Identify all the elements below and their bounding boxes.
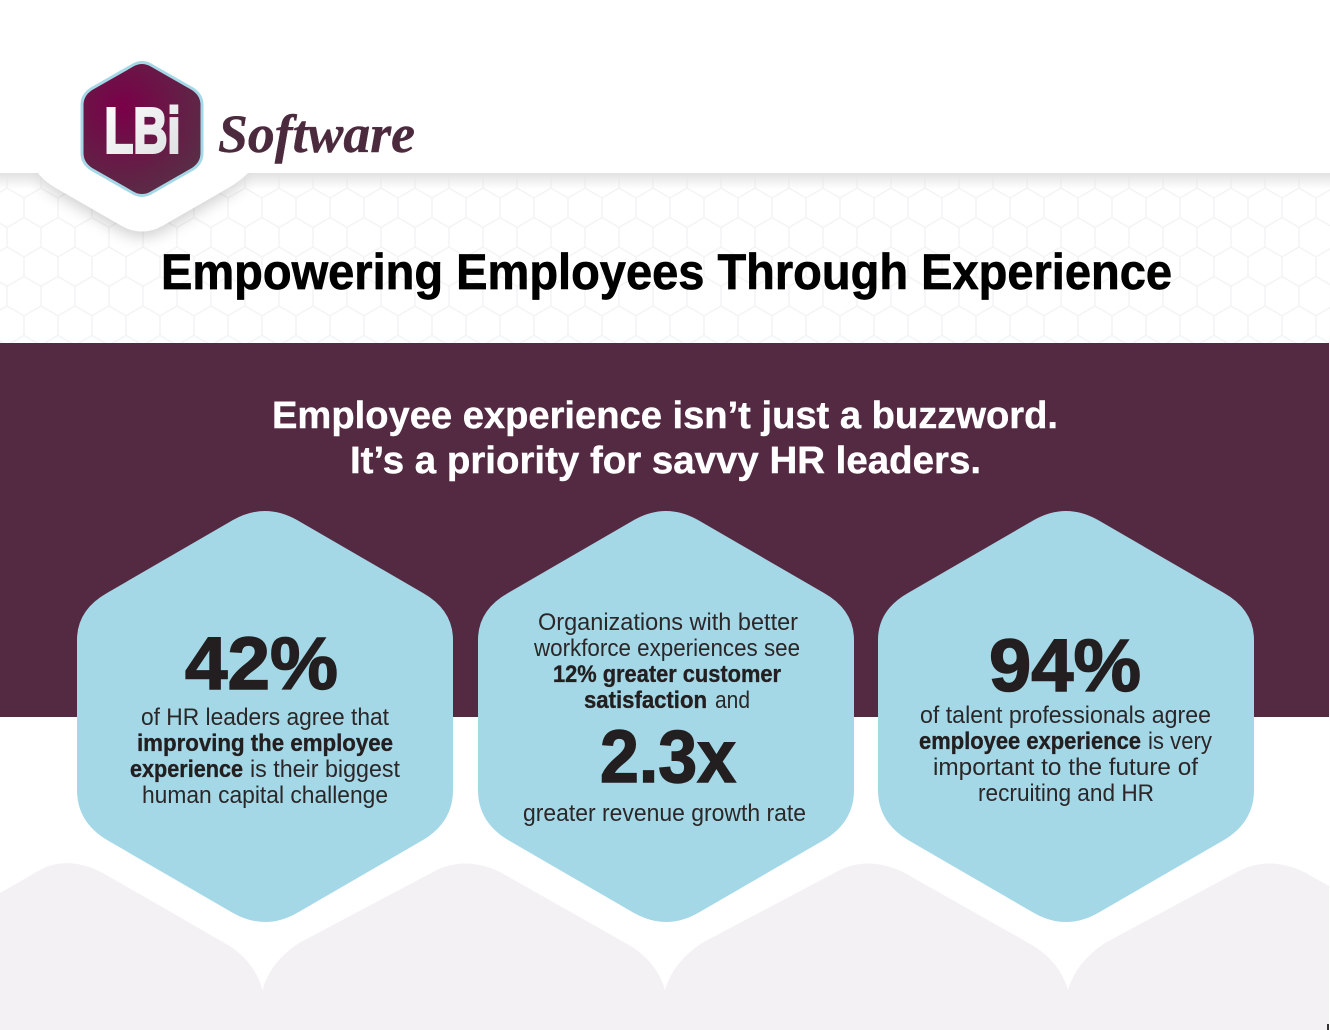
number 94%: 94% xyxy=(989,624,1141,707)
description: recruiting and HR xyxy=(978,780,1154,807)
description: is very xyxy=(1148,728,1212,755)
panel: 94% stat xyxy=(878,511,1254,922)
honeycomb background band xyxy=(0,173,1330,343)
intro text xyxy=(533,609,800,714)
closing text: greater revenue growth rate xyxy=(523,800,806,827)
subheading: Employee experience isn’t just a buzzword. xyxy=(272,395,1058,437)
description xyxy=(919,702,1212,807)
logo xyxy=(82,62,415,196)
white header strip xyxy=(0,0,1330,173)
intro text: Organizations with better xyxy=(538,609,798,636)
Software wordmark: Software xyxy=(218,104,415,164)
corner mark xyxy=(1327,1024,1329,1030)
description: of HR leaders agree that xyxy=(141,704,389,731)
icon: LBi hexagon xyxy=(82,62,202,196)
intro text: 12% greater customer xyxy=(553,661,781,688)
intro text: and xyxy=(715,687,750,714)
intro text: workforce experiences see xyxy=(533,635,800,662)
hexagon 3 xyxy=(878,511,1254,922)
description: important to the future of xyxy=(933,754,1198,781)
description: improving the employee xyxy=(137,730,393,757)
description: human capital challenge xyxy=(142,782,388,809)
subheading: It’s a priority for savvy HR leaders. xyxy=(350,440,981,482)
description: of talent professionals agree xyxy=(920,702,1211,729)
logo tab xyxy=(38,173,248,232)
hexagon 2 xyxy=(478,511,854,922)
hexagon 1 xyxy=(77,511,453,922)
LBi wordmark: LBi xyxy=(104,94,180,166)
description: experience xyxy=(130,756,243,783)
number 2.3x: 2.3x xyxy=(600,715,736,798)
description: employee experience xyxy=(919,728,1141,755)
purple band xyxy=(0,343,1329,717)
intro text: satisfaction xyxy=(584,687,707,714)
description xyxy=(130,704,400,809)
panel: 2.3x stat xyxy=(478,511,854,922)
number 42%: 42% xyxy=(185,622,338,705)
subheading xyxy=(272,395,1058,482)
bottom grey scalloped band xyxy=(0,863,1329,1030)
panel: 42% stat xyxy=(77,511,453,922)
title: Empowering Employees Through Experience xyxy=(161,244,1172,300)
description: is their biggest xyxy=(250,756,400,783)
